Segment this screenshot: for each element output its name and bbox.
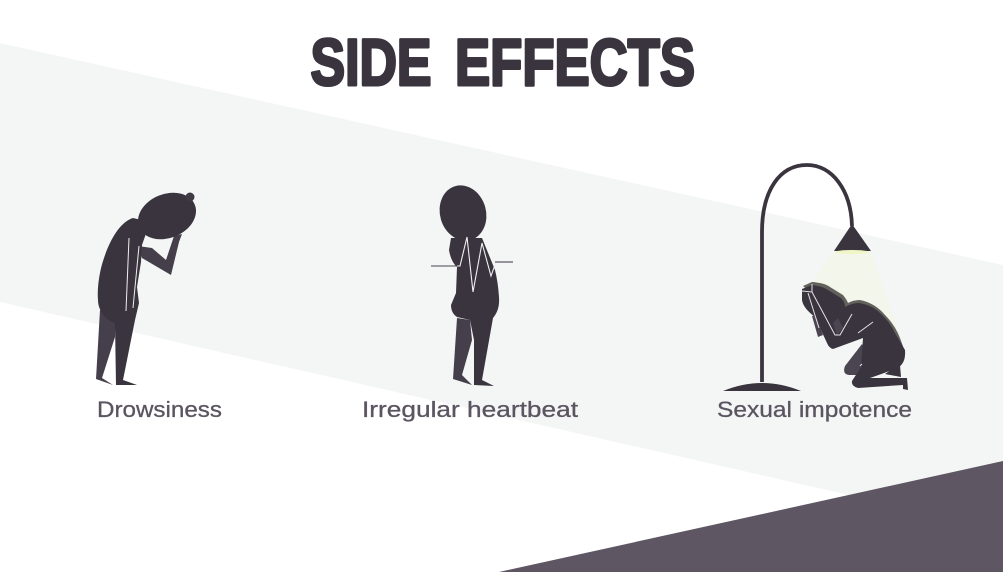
- back leg: [96, 310, 116, 385]
- body: [98, 218, 150, 385]
- bottom corner triangle: [499, 461, 1003, 572]
- body: [802, 285, 908, 390]
- pulse line outer left: [431, 265, 457, 267]
- body: [449, 238, 499, 386]
- lamp bulb: [835, 250, 869, 254]
- head: [433, 180, 493, 246]
- figure: irregular heartbeat: [431, 180, 513, 386]
- highlight lines: [802, 284, 873, 366]
- label: drowsiness: Drowsiness: [97, 397, 222, 422]
- forearm: [812, 316, 823, 337]
- figure: sexual impotence under lamp: [723, 165, 908, 391]
- hair bun: [186, 192, 194, 202]
- rear foot: [885, 365, 901, 377]
- lamp pole: [762, 165, 852, 382]
- highlight lines: [126, 238, 139, 311]
- figure: drowsiness: [96, 184, 203, 385]
- pulse line outer right: [495, 261, 513, 263]
- label: irregular heartbeat: Irregular heartbeat: [362, 397, 578, 422]
- head: [131, 184, 203, 248]
- title: [310, 25, 695, 99]
- lamp shade: [834, 224, 871, 251]
- pulse line: [431, 237, 513, 292]
- label: sexual impotence: Sexual impotence: [717, 397, 912, 422]
- light cone: [812, 252, 898, 330]
- lamp base: [723, 383, 801, 391]
- lighter arm: [833, 318, 843, 335]
- title word: effects: EFFECTS: [455, 25, 695, 99]
- back leg: [453, 318, 472, 385]
- arm: [138, 234, 182, 275]
- lighter leg: [844, 344, 868, 375]
- rim shadow: [803, 282, 905, 352]
- pulse line inner: [457, 237, 496, 292]
- title word: side: SIDE: [310, 25, 432, 99]
